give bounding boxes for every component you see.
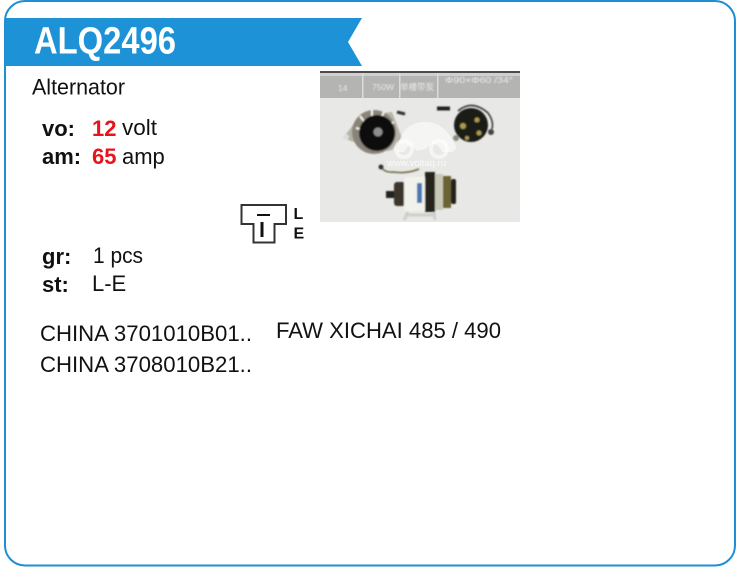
stator terminals — [42, 271, 126, 297]
amperage spec: amp — [122, 144, 165, 169]
voltage spec: volt — [122, 115, 157, 140]
product photo — [320, 71, 520, 222]
spec table strip: 单槽带泵 — [400, 82, 435, 92]
watermark: www.voltaq.ru — [386, 158, 446, 169]
stator terminals: st: — [42, 272, 69, 297]
spec table strip: 14 — [338, 83, 348, 93]
amperage spec — [42, 144, 165, 169]
alternator side view — [378, 164, 456, 220]
part number: ALQ2496 — [34, 20, 176, 62]
alternator front view — [343, 110, 405, 154]
spec table strip — [320, 71, 520, 98]
spec table strip: 750W — [372, 82, 394, 92]
group quantity — [42, 243, 143, 269]
watermark — [386, 122, 456, 169]
group quantity: gr: — [42, 244, 71, 269]
OEM numbers — [40, 321, 252, 377]
group quantity: 1 pcs — [93, 243, 143, 268]
vehicle application: FAW XICHAI 485 / 490 — [276, 318, 501, 343]
alternator rear view — [437, 105, 494, 142]
amperage spec: 65 — [92, 144, 116, 169]
spec table strip: Φ90×Φ60 /34° — [445, 75, 513, 85]
terminal connector icon: E — [294, 226, 304, 242]
stator terminals: L-E — [92, 271, 126, 296]
OEM numbers: CHINA 3708010B21.. — [40, 352, 252, 377]
terminal connector icon — [242, 205, 304, 242]
voltage spec: 12 — [92, 116, 116, 141]
OEM numbers: CHINA 3701010B01.. — [40, 321, 252, 346]
voltage spec: vo: — [42, 116, 75, 141]
amperage spec: am: — [42, 144, 81, 169]
voltage spec — [42, 115, 157, 141]
product type: Alternator — [32, 74, 125, 100]
title banner — [5, 18, 362, 66]
terminal labels: L — [294, 206, 304, 223]
